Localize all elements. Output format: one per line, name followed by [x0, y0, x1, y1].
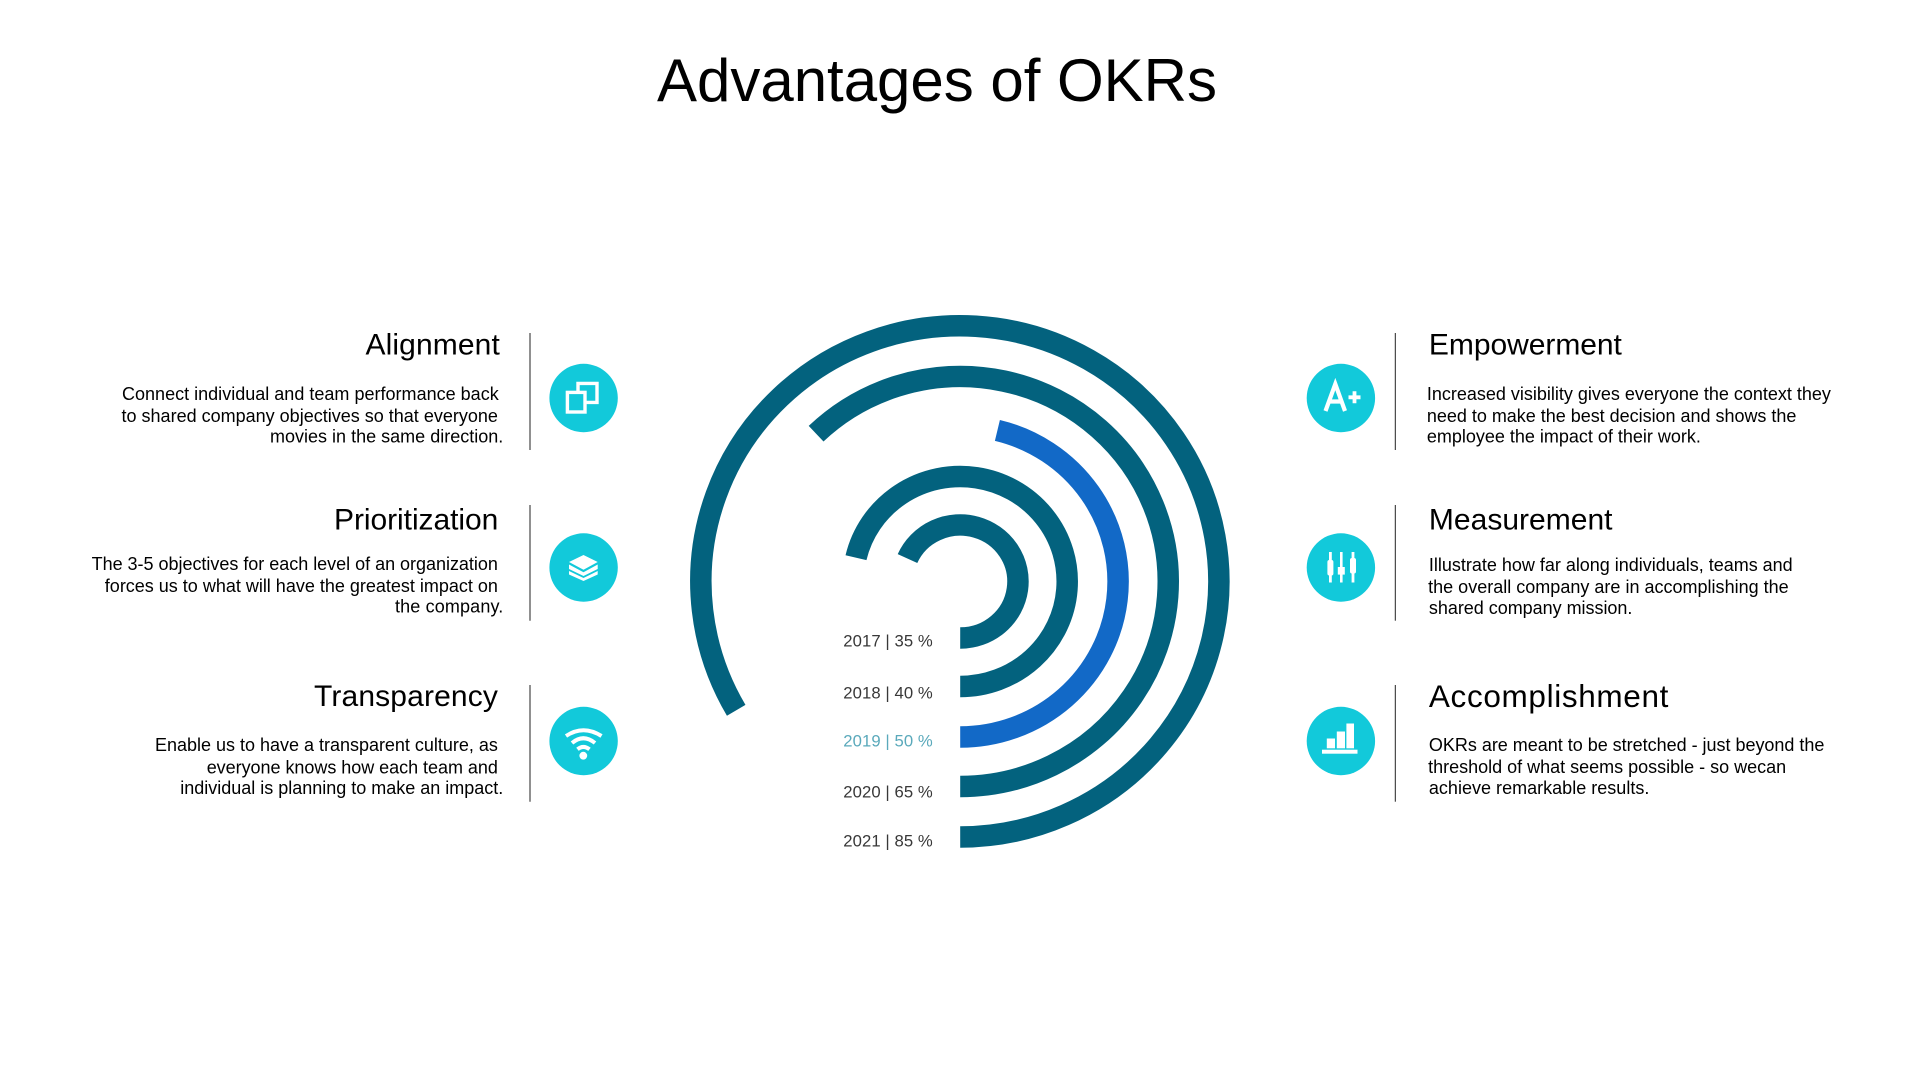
heading: transparency: Transparency — [314, 680, 498, 713]
text block: empowerment: Increased visibility gives everyone the context they — [1427, 384, 1831, 404]
heading: alignment: Alignment — [366, 328, 500, 362]
heading: empowerment: Empowerment — [1429, 328, 1623, 362]
text block: empowerment — [1427, 384, 1831, 447]
text block: measurement: Illustrate how far along individuals, teams and — [1429, 555, 1793, 575]
text block: measurement: shared company mission. — [1429, 598, 1632, 618]
text block: empowerment: employee the impact of their work. — [1427, 427, 1701, 447]
text block: accomplishment: threshold of what seems possible - so wecan — [1428, 757, 1786, 777]
label: 2021: 2021 | 85 % — [843, 832, 933, 851]
label: 2018: 2018 | 40 % — [843, 683, 933, 702]
text block: alignment: movies in the same direction. — [270, 427, 503, 447]
arc: 2018 40 percent — [856, 477, 1067, 686]
text block: transparency: Enable us to have a transparent culture, as — [155, 735, 498, 755]
arc: 2019 50 percent — [960, 430, 1118, 737]
panel: accomplishment — [1307, 678, 1824, 802]
arc: 2020 65 percent — [816, 377, 1168, 786]
arc: 2017 35 percent — [908, 525, 1018, 638]
icon: overlapping squares — [549, 364, 618, 432]
radial bar chart — [701, 326, 1219, 851]
icon: wifi — [549, 707, 618, 775]
panel: prioritization — [92, 504, 618, 621]
text block: empowerment: need to make the best decision and shows the — [1427, 406, 1796, 426]
heading: measurement: Measurement — [1429, 504, 1613, 536]
panel: empowerment — [1307, 328, 1831, 450]
text block: accomplishment — [1428, 735, 1824, 798]
text block: prioritization: forces us to what will have the greatest impact on — [105, 576, 498, 596]
icon: bar chart — [1307, 707, 1375, 775]
icon: A plus grade — [1307, 364, 1375, 432]
text block: prioritization: The 3-5 objectives for each level of an organization — [92, 554, 498, 574]
text block: accomplishment: OKRs are meant to be stretched - just beyond the — [1429, 735, 1824, 755]
panel: alignment — [122, 328, 618, 450]
panel: transparency — [155, 680, 618, 802]
heading: prioritization: Prioritization — [334, 504, 498, 536]
text block: prioritization — [92, 554, 503, 617]
icon: stacked layers — [549, 533, 618, 602]
heading: accomplishment: Accomplishment — [1429, 678, 1669, 714]
text block: alignment — [122, 384, 503, 447]
text block: accomplishment: achieve remarkable results. — [1429, 778, 1649, 798]
text block: prioritization: the company. — [395, 597, 503, 617]
arc: 2021 85 percent — [701, 326, 1219, 837]
label: 2020: 2020 | 65 % — [843, 783, 933, 802]
panel: measurement — [1307, 504, 1793, 621]
title: Advantages of OKRs — [657, 47, 1217, 114]
text block: measurement — [1428, 555, 1793, 618]
text block: transparency: everyone knows how each team and — [207, 757, 498, 777]
text block: transparency: individual is planning to make an impact. — [180, 778, 503, 798]
text block: measurement: the overall company are in accomplishing the — [1428, 577, 1789, 597]
icon: sliders — [1307, 533, 1375, 602]
label: 2017: 2017 | 35 % — [843, 632, 933, 651]
text block: alignment: to shared company objectives so that everyone — [122, 406, 498, 426]
text block: transparency — [155, 735, 503, 798]
text block: alignment: Connect individual and team performance back — [122, 384, 500, 404]
label: 2019: 2019 | 50 % — [843, 732, 933, 751]
